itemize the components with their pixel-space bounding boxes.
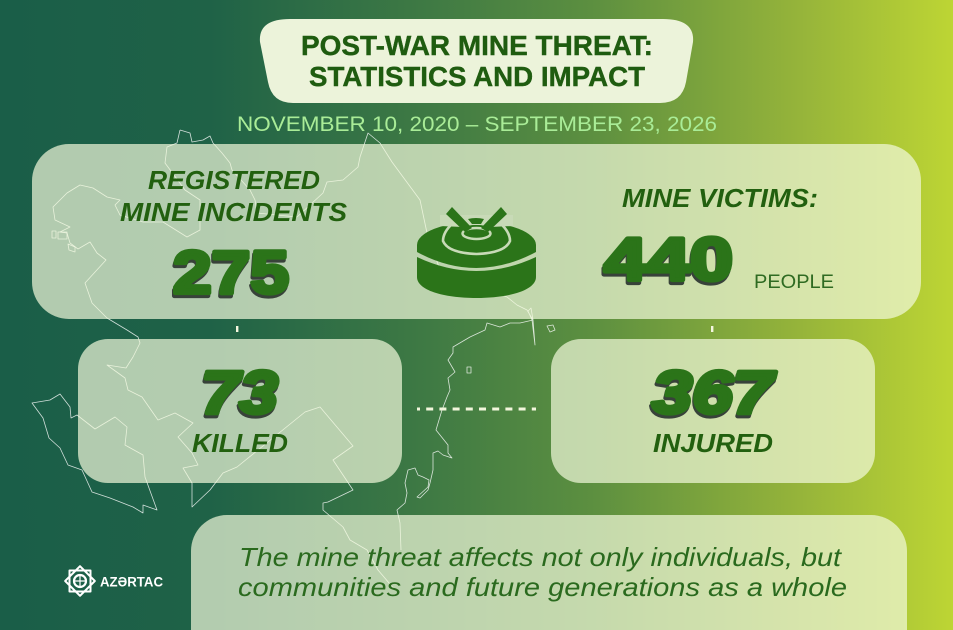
number: 73 killed: 73 [201, 359, 278, 426]
heading: registered mine incidents: MINE INCIDENTS [120, 199, 347, 227]
connector tick left [236, 326, 238, 332]
label: injured: INJURED [653, 430, 773, 458]
date range subtitle: NOVEMBER 10, 2020 – SEPTEMBER 23, 2026 [237, 113, 717, 136]
label: killed: KILLED [192, 430, 288, 458]
logo: AZERTAC [65, 566, 163, 596]
map outline of Azerbaijan [32, 130, 555, 590]
heading: registered mine incidents: REGISTERED [148, 167, 320, 195]
title pill: STATISTICS AND IMPACT [309, 61, 645, 92]
icon: land mine [417, 207, 536, 298]
panel: closing statement: The mine threat affects not only individuals, but [239, 542, 843, 572]
number: 440 victims: 440 [604, 226, 733, 293]
panel: killed [78, 339, 402, 483]
logo: AZERTAC: AZƏRTAC [100, 574, 163, 590]
title pill: POST-WAR MINE THREAT: [301, 30, 653, 61]
heading: mine victims: MINE VICTIMS: [622, 185, 818, 213]
connector tick right [711, 326, 713, 332]
panel: closing statement [191, 515, 907, 630]
panel: injured [551, 339, 875, 483]
number: 367 injured: 367 [652, 359, 776, 426]
label: people: PEOPLE [754, 271, 834, 293]
heading: registered mine incidents [120, 167, 347, 227]
panel: registered incidents and mine victims [32, 144, 921, 319]
panel: closing statement: communities and future generations as a whole [238, 572, 847, 602]
dashed connector [417, 408, 536, 410]
number: 275 incidents: 275 [173, 239, 289, 306]
icon: logo star [65, 566, 95, 596]
title pill [260, 19, 693, 103]
